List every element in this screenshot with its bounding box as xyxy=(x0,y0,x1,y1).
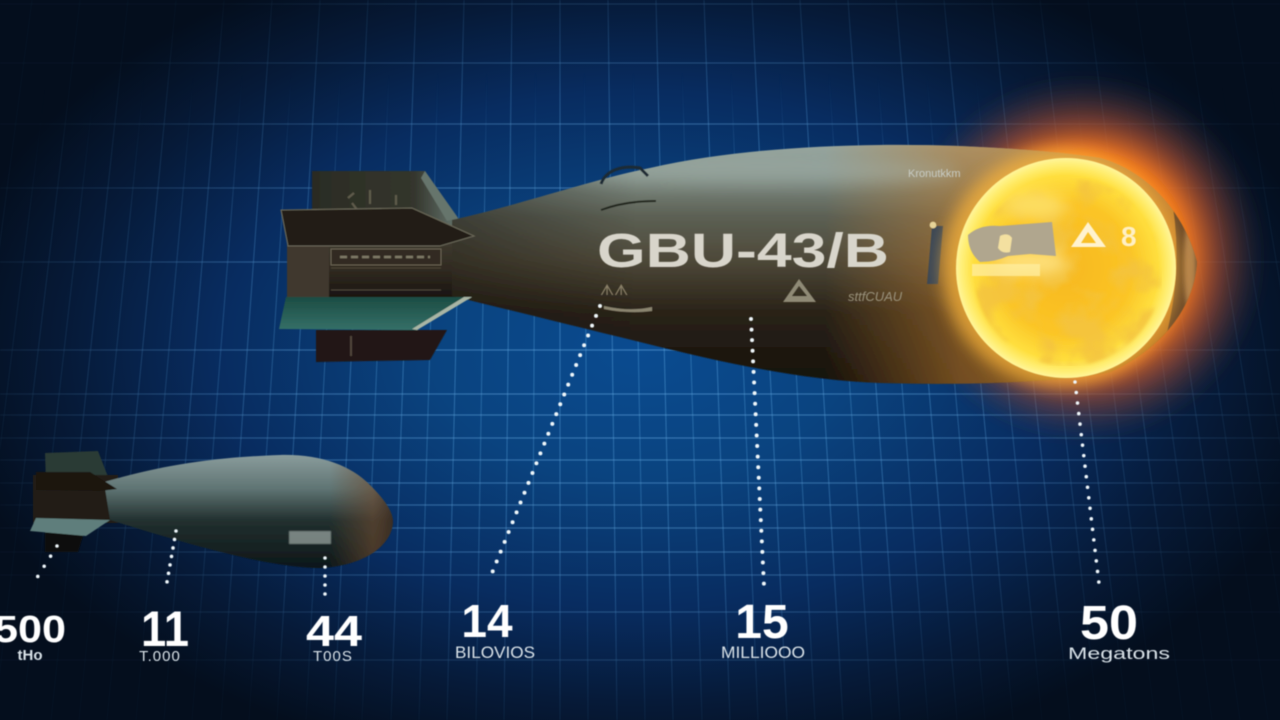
stat: 500 xyxy=(0,609,66,664)
fireball left bloom xyxy=(942,150,1178,386)
lower rear fin xyxy=(316,330,447,362)
stat: 44: T00S xyxy=(313,648,353,665)
stat: 50: Megatons xyxy=(1068,645,1170,663)
small bomb xyxy=(30,451,393,568)
large bomb GBU-43/B xyxy=(279,140,1200,390)
stat: 11: T.000 xyxy=(139,648,181,665)
teal lower side fin xyxy=(279,297,472,330)
fireball overlay markings: 8 xyxy=(1121,221,1137,252)
small bomb body xyxy=(104,455,393,568)
fireball overlay markings xyxy=(968,221,1137,276)
fireball xyxy=(956,158,1176,378)
stat: 11: 11 xyxy=(141,601,189,657)
dotted leader lines xyxy=(33,306,1100,600)
bomb small markings: Kronutkkm xyxy=(908,168,961,180)
stat: 14: 14 xyxy=(461,595,513,647)
fireball outer glow xyxy=(900,76,1264,440)
upper side fin xyxy=(281,208,474,246)
stat: 50: 50 xyxy=(1080,597,1138,650)
tail cylinder xyxy=(287,240,467,300)
stat: 15: 15 xyxy=(735,596,789,649)
stat: 50 xyxy=(1068,597,1170,663)
stat: 44: 44 xyxy=(306,607,363,656)
stat: 15: MILLIOOO xyxy=(721,644,805,662)
small bomb upper fin xyxy=(45,451,110,482)
bomb small markings: sttfCUAU xyxy=(848,289,903,304)
stat: 14: BILOVIOS xyxy=(455,644,535,662)
stat: 14 xyxy=(455,595,535,662)
bomb label: GBU-43/B: GBU-43/B xyxy=(597,225,889,278)
small bomb fins xyxy=(30,472,117,536)
stat: 500: tHo xyxy=(18,647,42,664)
small bomb tail xyxy=(33,475,118,523)
bomb body xyxy=(450,140,1200,390)
bomb small markings: ᗑᗑ xyxy=(600,282,628,299)
bomb small markings xyxy=(600,168,961,304)
stat: 15 xyxy=(721,596,805,662)
small bomb lower fin xyxy=(45,520,88,552)
upper rear fin xyxy=(312,171,458,230)
